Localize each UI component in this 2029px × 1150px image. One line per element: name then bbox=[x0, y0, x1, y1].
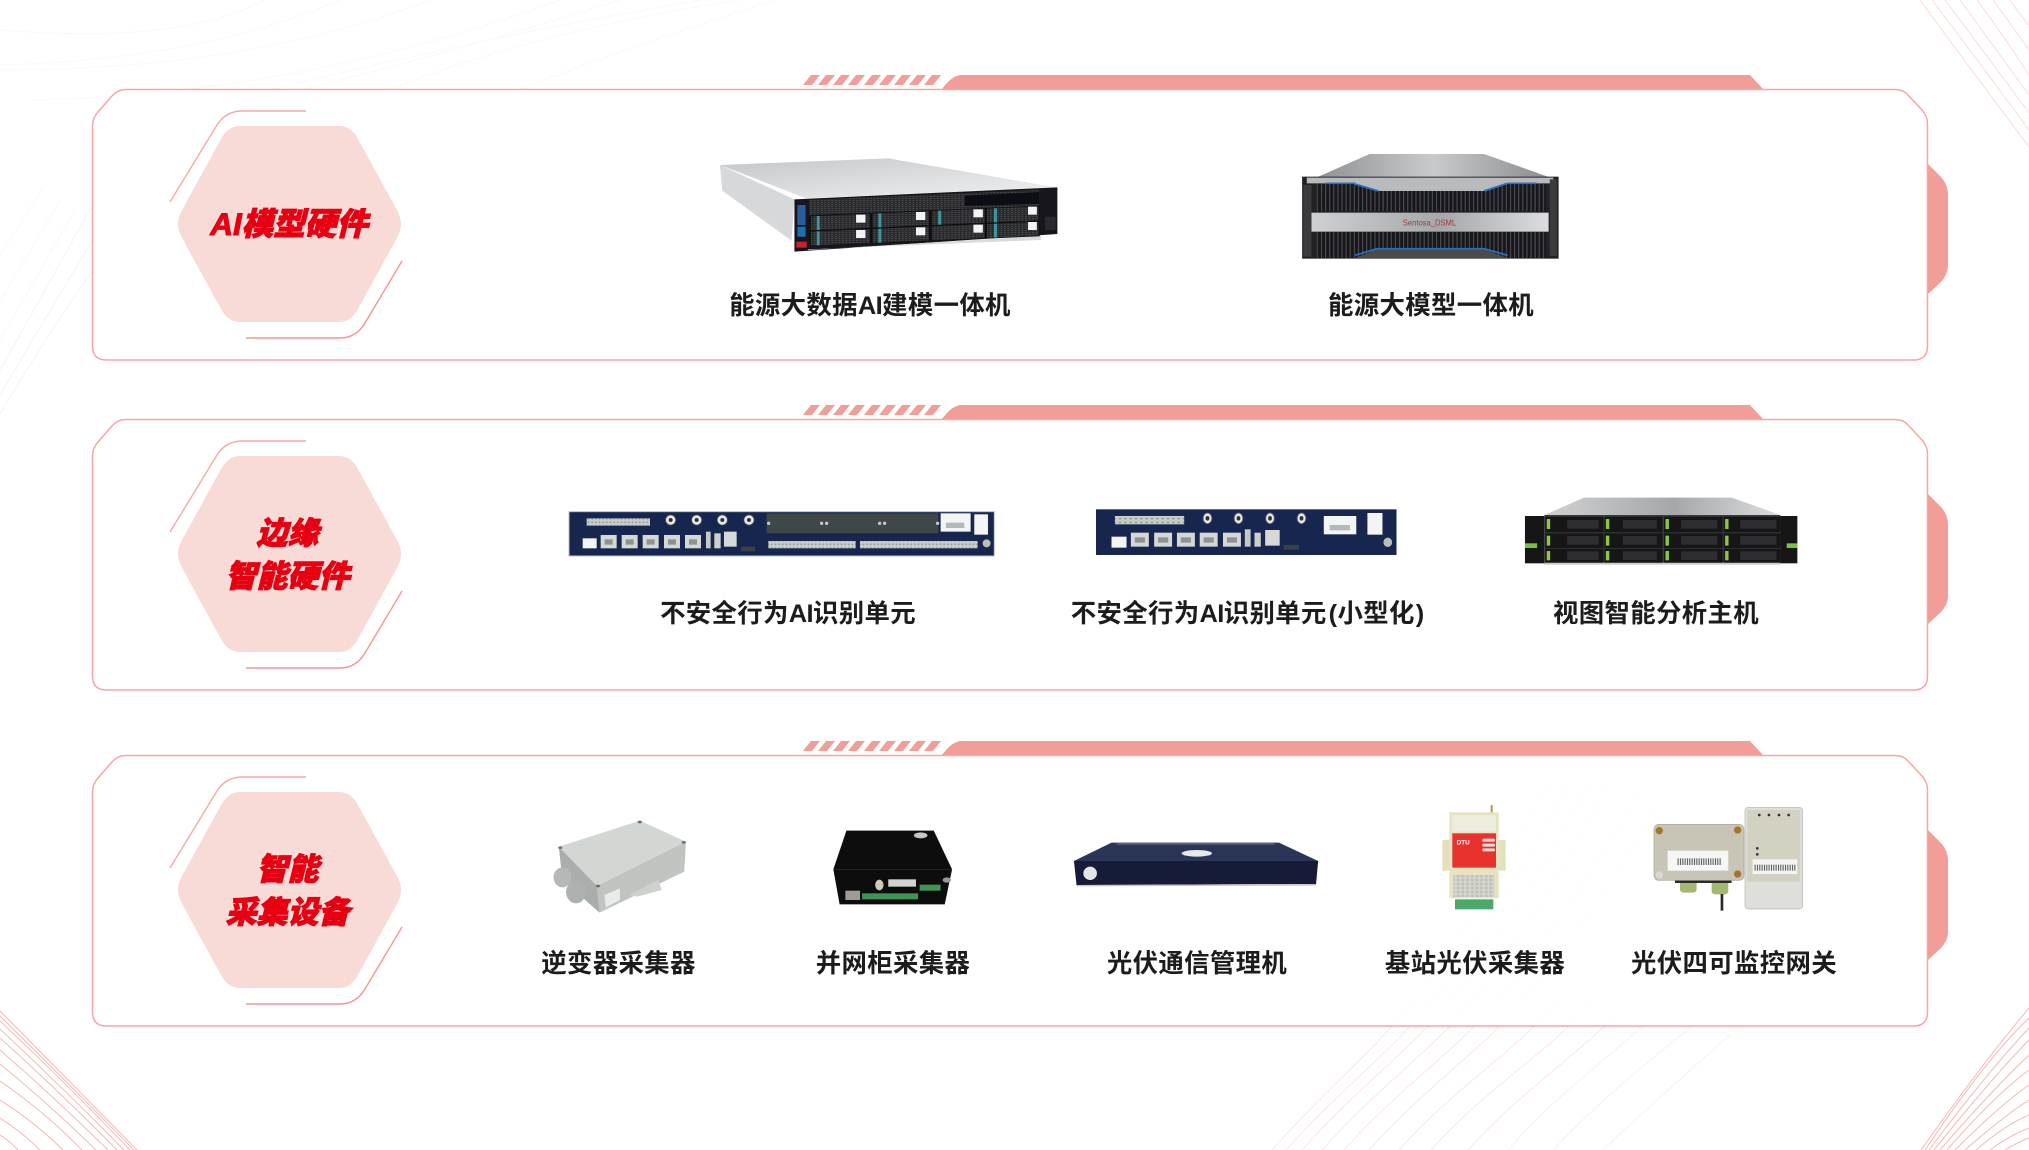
product image: rack server bbox=[720, 158, 1057, 252]
panel: 智能采集设备 bbox=[92, 741, 1948, 1026]
label: 能源大数据AI建模一体机: 能源大数据AI建模一体机 bbox=[729, 292, 1011, 320]
label: 并网柜采集器: 并网柜采集器 bbox=[816, 950, 970, 978]
heading: 边缘智能硬件: 智能硬件 bbox=[226, 559, 352, 594]
product image: PV monitoring gateway bbox=[1654, 807, 1803, 911]
product image: base station PV collector bbox=[1442, 805, 1506, 909]
product image: compact AI unit panel bbox=[1096, 509, 1397, 555]
product image: large AI unit panel bbox=[569, 512, 994, 556]
product image: AI server bbox=[1302, 154, 1559, 259]
heading: 智能采集设备 bbox=[226, 852, 353, 930]
panel: AI模型硬件 bbox=[92, 75, 1948, 360]
label: 光伏通信管理机: 光伏通信管理机 bbox=[1107, 950, 1287, 978]
label: 不安全行为AI识别单元(小型化): 不安全行为AI识别单元(小型化) bbox=[1071, 600, 1427, 628]
heading: 边缘智能硬件: 边缘 bbox=[256, 516, 322, 551]
product image: PV communication manager bbox=[1074, 843, 1318, 886]
panel frame bbox=[92, 405, 1948, 690]
label: 基站光伏采集器: 基站光伏采集器 bbox=[1385, 950, 1565, 978]
product image: AI server: Sentosa_DSML bbox=[1403, 218, 1457, 227]
hexagon badge bbox=[170, 441, 402, 668]
hexagon badge bbox=[170, 777, 402, 1004]
product image: grid cabinet collector bbox=[833, 831, 952, 904]
product image: base station PV collector: DTU bbox=[1457, 840, 1470, 847]
label: 能源大模型一体机: 能源大模型一体机 bbox=[1328, 292, 1534, 320]
heading: 智能采集设备: 智能 bbox=[256, 852, 322, 887]
label: 视图智能分析主机: 视图智能分析主机 bbox=[1553, 600, 1759, 628]
label: 逆变器采集器: 逆变器采集器 bbox=[541, 950, 696, 978]
hexagon badge bbox=[170, 111, 402, 338]
product image: inverter collector bbox=[554, 821, 686, 913]
label: 光伏四可监控网关: 光伏四可监控网关 bbox=[1631, 950, 1837, 978]
heading: AI模型硬件: AI模型硬件 bbox=[209, 206, 371, 242]
product image: video analysis host bbox=[1525, 498, 1797, 565]
panel frame bbox=[92, 75, 1948, 360]
panel frame bbox=[92, 741, 1948, 1026]
panel: 边缘智能硬件 bbox=[92, 405, 1948, 690]
heading: 边缘智能硬件 bbox=[226, 516, 352, 594]
heading: 智能采集设备: 采集设备 bbox=[226, 895, 353, 930]
label: 不安全行为AI识别单元: 不安全行为AI识别单元 bbox=[660, 600, 916, 628]
